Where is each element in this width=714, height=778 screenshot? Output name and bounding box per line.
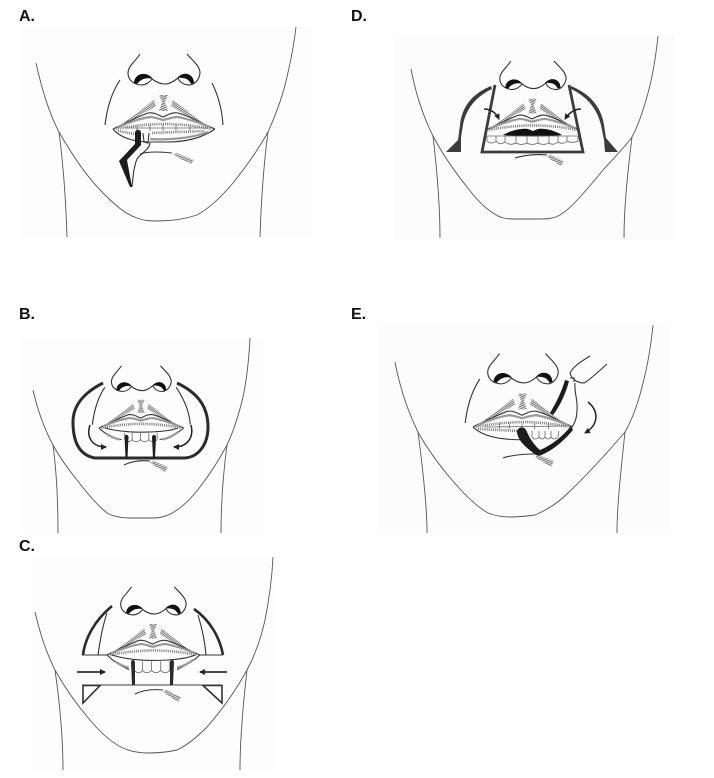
circumoral thick incision line xyxy=(73,383,208,458)
face outline D xyxy=(411,36,658,238)
panel D: rectangular flap xyxy=(351,8,658,238)
horizontal line and triangles C xyxy=(82,684,222,686)
left cheek curve and triangle D xyxy=(446,86,492,152)
crease E xyxy=(503,454,554,467)
teeth row D xyxy=(487,136,578,144)
inward arrows D xyxy=(484,109,499,119)
black zig-zag flap incision xyxy=(119,130,141,187)
panel E: flap elevated with finger xyxy=(351,306,653,533)
open mouth black D xyxy=(503,129,562,136)
nose and lips E xyxy=(465,354,573,440)
advancement arrows C xyxy=(77,671,105,673)
panel B: circumoral incision xyxy=(19,306,250,533)
face outline A xyxy=(36,27,296,237)
heading A: A. xyxy=(19,8,35,25)
nose and lips B xyxy=(92,366,190,442)
rectangular incision frame xyxy=(482,85,583,152)
heading C: C. xyxy=(19,538,35,555)
face outline E xyxy=(395,325,653,533)
teeth E xyxy=(532,431,559,439)
right cheek curve and triangle D xyxy=(571,86,618,152)
thin flap edge and finger xyxy=(570,356,607,427)
black flap incisions E xyxy=(550,380,569,415)
heading B: B. xyxy=(19,306,35,323)
face outline B xyxy=(33,338,250,533)
rotation arrows B xyxy=(89,425,106,447)
crease C xyxy=(135,690,181,702)
thin flap outline xyxy=(132,133,150,187)
heading D: D. xyxy=(351,8,367,25)
panel A: cross-lip flap incision xyxy=(19,8,296,237)
panel C: flap advancement xyxy=(19,538,273,770)
rotation arrow E xyxy=(585,402,596,433)
face outline C xyxy=(35,557,273,770)
chin crease and hatch B xyxy=(124,461,168,472)
upper cheek flaps C xyxy=(83,606,112,655)
vertical lip cuts xyxy=(124,435,156,458)
heading E: E. xyxy=(351,306,366,323)
nose and upper lip D xyxy=(486,61,580,130)
nose and lips C xyxy=(107,587,200,673)
nose and lips A xyxy=(105,54,223,164)
vertical lip cuts C xyxy=(131,660,174,685)
crease D xyxy=(515,155,564,166)
